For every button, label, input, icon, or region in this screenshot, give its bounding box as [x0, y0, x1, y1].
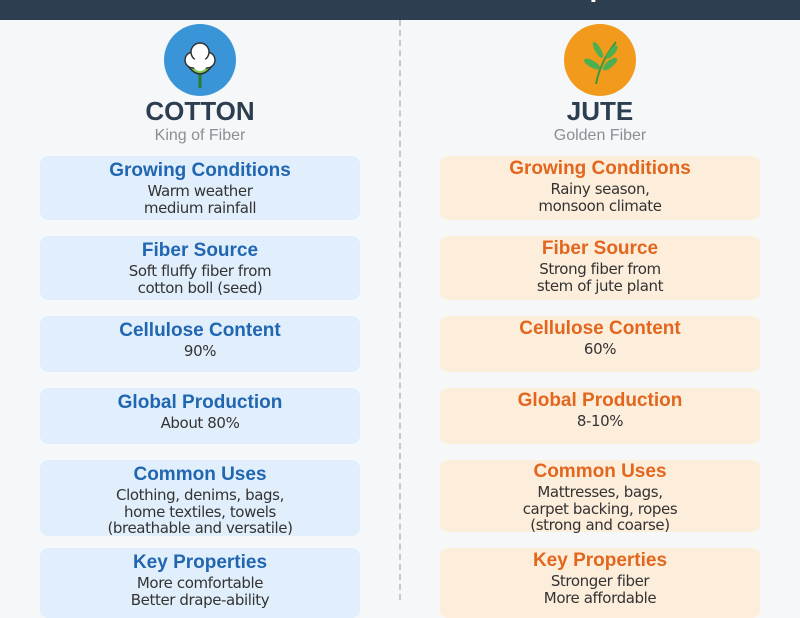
jute: cellulose [440, 316, 760, 372]
cotton: uses [40, 460, 360, 536]
cotton: production: Global Production [118, 392, 282, 413]
cotton: growing: Warm weather [147, 182, 253, 200]
cotton: uses: home textiles, towels [124, 502, 276, 520]
cotton: fiber source: cotton boll (seed) [138, 278, 262, 296]
jute: cellulose: Cellulose Content [519, 318, 681, 339]
jute: uses: carpet backing, ropes [523, 500, 677, 518]
jute: growing [440, 156, 760, 220]
cotton: fiber source [40, 236, 360, 300]
jute subtitle: Golden Fiber [554, 127, 646, 144]
cotton: growing: Growing Conditions [109, 160, 291, 181]
jute: uses: Mattresses, bags, [537, 483, 663, 501]
cotton: cellulose [40, 316, 360, 372]
jute: fiber source: stem of jute plant [537, 276, 663, 294]
cotton: production: About 80% [161, 414, 239, 432]
jute: fiber source: Fiber Source [542, 238, 658, 259]
cotton: fiber source: Fiber Source [142, 240, 258, 261]
cotton: uses: Common Uses [133, 464, 267, 485]
header bar [0, 0, 800, 20]
jute: production [440, 388, 760, 444]
jute: production: Global Production [518, 390, 682, 411]
jute: fiber source [440, 236, 760, 300]
cotton title: COTTON [145, 96, 255, 126]
cotton: properties [40, 548, 360, 618]
cotton: cellulose: Cellulose Content [119, 320, 281, 341]
cotton: properties: Key Properties [133, 552, 267, 573]
cotton: growing [40, 156, 360, 220]
jute: properties [440, 548, 760, 618]
cotton: properties: Better drape-ability [131, 590, 269, 608]
icon: cotton [164, 24, 236, 96]
jute: properties: More affordable [544, 588, 656, 606]
cotton: production [40, 388, 360, 444]
cotton: uses: (breathable and versatile) [107, 519, 293, 537]
cotton: fiber source: Soft fluffy fiber from [129, 262, 271, 280]
jute: fiber source: Strong fiber from [539, 260, 661, 278]
icon: jute [564, 24, 636, 96]
jute: growing: Rainy season, [551, 180, 649, 198]
cotton: uses: Clothing, denims, bags, [116, 486, 284, 504]
cotton subtitle: King of Fiber [155, 127, 245, 144]
jute: production: 8-10% [577, 412, 623, 430]
cotton: growing: medium rainfall [144, 198, 256, 216]
jute title: JUTE [567, 96, 633, 126]
cotton: cellulose: 90% [184, 342, 216, 360]
cotton: properties: More comfortable [137, 574, 263, 592]
jute: uses: Common Uses [533, 461, 667, 482]
jute: cellulose: 60% [584, 340, 616, 358]
jute: uses: (strong and coarse) [530, 516, 670, 534]
jute: properties: Stronger fiber [551, 572, 649, 590]
jute: growing: Growing Conditions [509, 158, 691, 179]
jute: uses [440, 460, 760, 532]
jute: properties: Key Properties [533, 550, 667, 571]
jute: growing: monsoon climate [538, 196, 662, 214]
